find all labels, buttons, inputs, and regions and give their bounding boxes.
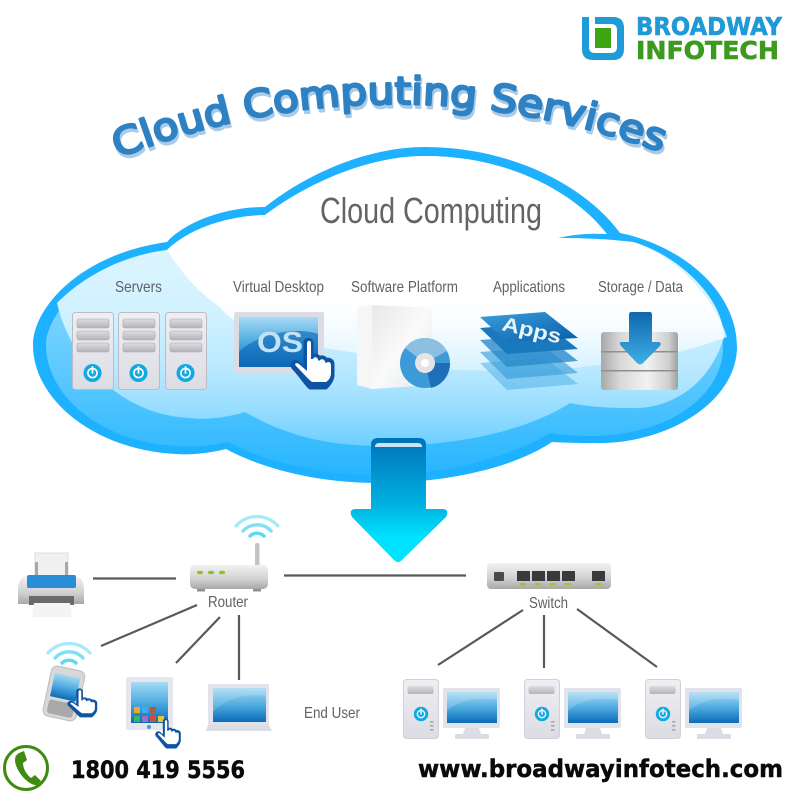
service: Servers (72, 279, 206, 390)
label: Virtual Desktop: Virtual Desktop (233, 279, 324, 296)
icon: phone call (4, 746, 48, 790)
logo: Broadway Infotech (582, 12, 782, 65)
icon: switch (487, 563, 611, 589)
icon: desktop computer 1 (404, 680, 500, 739)
service: Storage / Data (598, 279, 683, 390)
icon: OS monitor with hand: OS (257, 327, 303, 359)
service: Virtual Desktop (233, 279, 333, 388)
label: Applications: Applications (493, 279, 565, 296)
website url: www.broadwayinfotech.com (418, 755, 783, 783)
logo icon (582, 17, 624, 60)
cloud panel (33, 147, 737, 483)
logo text: INFOTECH: INFOTECH (636, 36, 779, 65)
icon: tablet with hand (126, 677, 180, 748)
title: Cloud Computing Services: Cloud Computing Services (112, 74, 666, 155)
logo text: BROADWAY: BROADWAY (636, 12, 782, 41)
icon: printer (18, 553, 84, 617)
label: Router: Router (208, 594, 249, 611)
icon: database with down arrow (601, 312, 678, 390)
label: Storage / Data: Storage / Data (598, 279, 683, 296)
label: Software Platform: Software Platform (351, 279, 458, 296)
network connection lines (93, 576, 657, 680)
icon: smartphone with hand (42, 644, 96, 722)
label: End User: End User (304, 705, 361, 722)
icon: router (190, 517, 278, 592)
service: Software Platform (351, 279, 458, 389)
label: Servers: Servers (115, 279, 162, 296)
arrow: cloud down to network (351, 438, 447, 562)
cloud heading: Cloud Computing (320, 190, 542, 231)
label: Switch: Switch (529, 595, 568, 612)
phone number: 1800 419 5556 (71, 756, 245, 784)
icon: software box with disc (357, 305, 450, 389)
icon: desktop computer 2 (524, 680, 621, 739)
icon: laptop (206, 684, 272, 731)
service: Applications (480, 279, 578, 390)
title: Cloud Computing Services: Cloud Computing Services (115, 78, 668, 158)
icon: server racks (72, 312, 206, 390)
icon: desktop computer 3 (646, 680, 742, 739)
icon: stacked app layers: Apps (500, 313, 563, 348)
